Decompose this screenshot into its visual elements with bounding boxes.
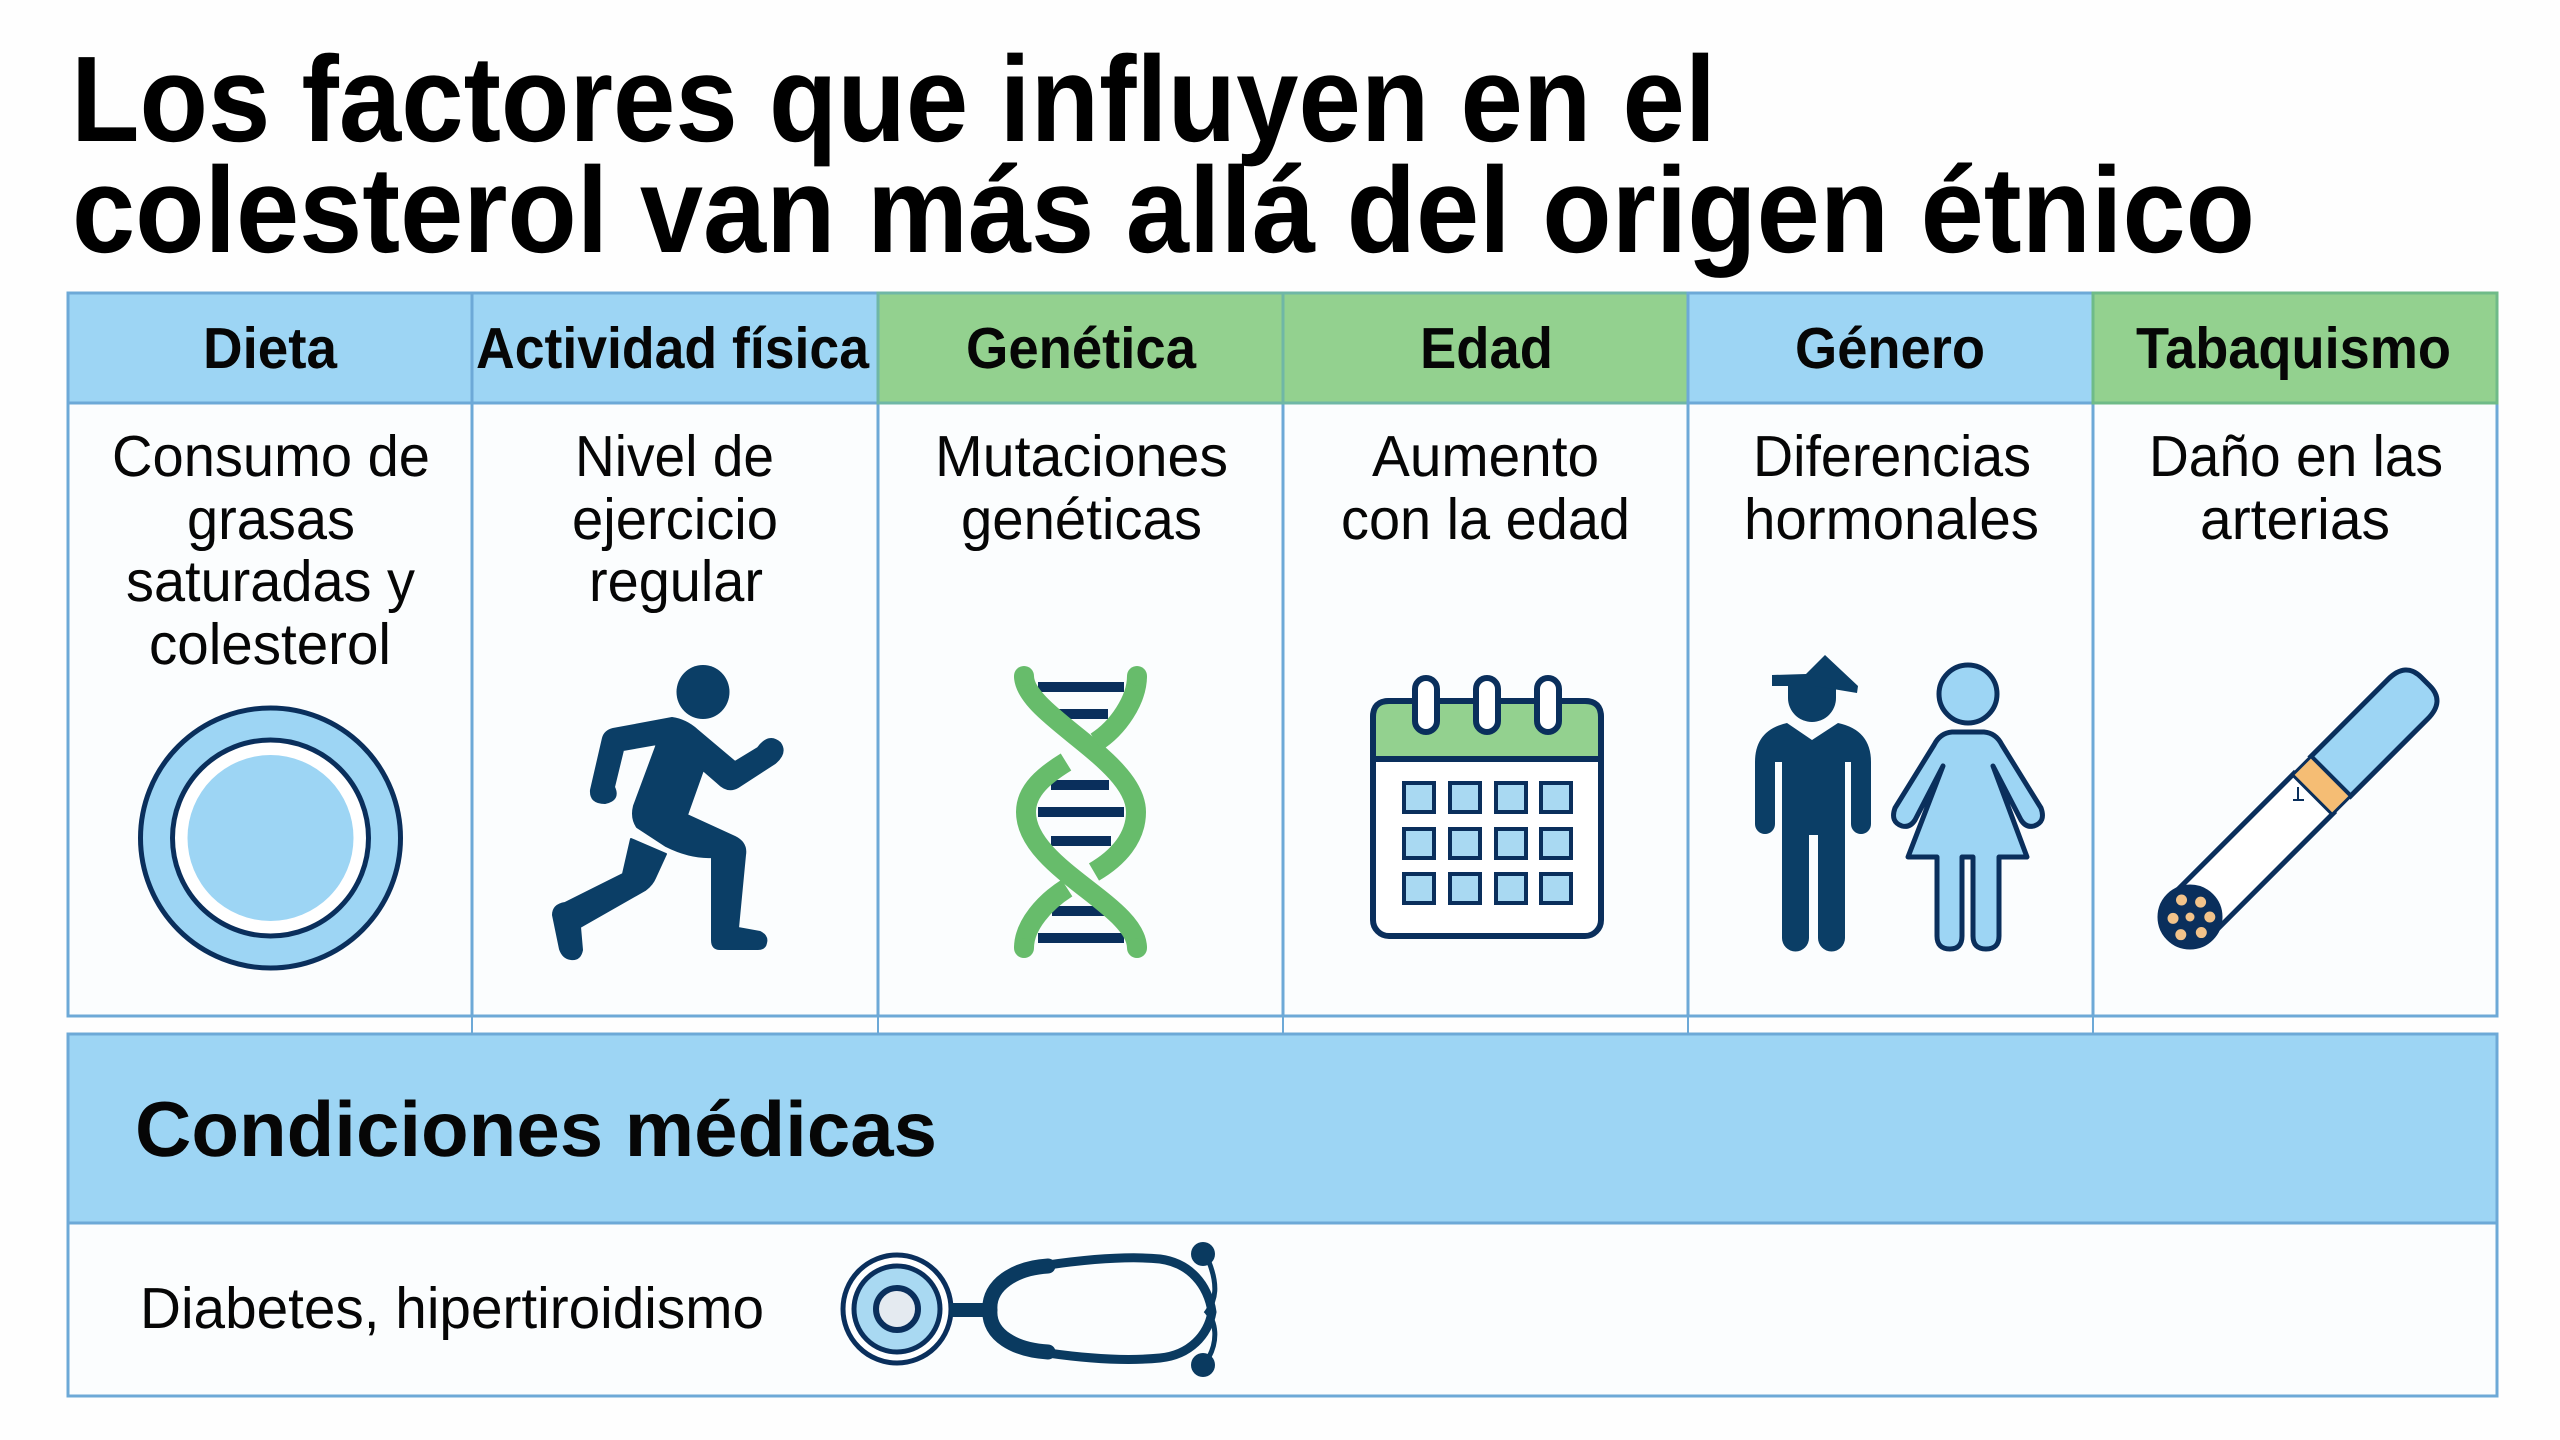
header: Dieta: Dieta bbox=[203, 316, 338, 381]
text: Actividad description: regular bbox=[589, 549, 763, 614]
text: Genética description: genéticas bbox=[961, 487, 1202, 552]
text: Genética description bbox=[935, 424, 1228, 552]
text: Edad description: con la edad bbox=[1341, 487, 1630, 552]
header: Genética: Genética bbox=[966, 316, 1197, 381]
header: Edad: Edad bbox=[1420, 316, 1553, 381]
text: Género description: hormonales bbox=[1744, 487, 2039, 552]
header: Condiciones médicas: Condiciones médicas bbox=[135, 1085, 937, 1173]
icon: cigarette bbox=[2148, 660, 2447, 959]
column stubs bbox=[472, 1016, 2093, 1033]
text: Edad description: Aumento bbox=[1372, 424, 1599, 489]
title bbox=[71, 31, 2255, 278]
text: Dieta description: Consumo de bbox=[112, 424, 430, 489]
text: Género description: Diferencias bbox=[1753, 424, 2031, 489]
header: Condiciones médicas bbox=[68, 1034, 2497, 1223]
text: Tabaquismo description: Daño en las bbox=[2149, 424, 2443, 489]
panel: Condiciones médicas bbox=[68, 1034, 2497, 1396]
header: Actividad física bbox=[472, 293, 878, 403]
icon: calendar bbox=[1373, 678, 1601, 936]
header: Género bbox=[1688, 293, 2093, 403]
header: Genética bbox=[878, 293, 1283, 403]
header: Tabaquismo: Tabaquismo bbox=[2136, 316, 2451, 381]
header: Actividad física: Actividad física bbox=[476, 316, 870, 381]
text: Actividad description: Nivel de bbox=[575, 424, 774, 489]
panel: Tabaquismo bbox=[2093, 293, 2497, 1016]
icon: runner bbox=[553, 665, 783, 959]
text: Género description bbox=[1744, 424, 2039, 552]
icon: man and woman bbox=[1755, 655, 2042, 952]
header: Edad bbox=[1283, 293, 1688, 403]
panel: Edad bbox=[1283, 293, 1688, 1016]
icon: plate bbox=[140, 708, 400, 968]
text: Diabetes, hipertiroidismo: Diabetes, hipertiroidismo bbox=[140, 1276, 764, 1341]
header: Tabaquismo bbox=[2093, 293, 2497, 403]
header: Género: Género bbox=[1795, 316, 1985, 381]
header: Dieta bbox=[68, 293, 472, 403]
icon: stethoscope bbox=[843, 1242, 1215, 1377]
panel: Actividad física bbox=[472, 293, 878, 1016]
icon: DNA helix bbox=[1014, 666, 1147, 958]
text: Tabaquismo description bbox=[2149, 424, 2443, 552]
panel: Genética bbox=[878, 293, 1283, 1016]
text: Actividad description: ejercicio bbox=[572, 487, 778, 552]
text: Dieta description: saturadas y bbox=[126, 549, 415, 614]
text: Dieta description: colesterol bbox=[149, 612, 391, 677]
text: Tabaquismo description: arterias bbox=[2200, 487, 2390, 552]
text: Dieta description: grasas bbox=[187, 487, 355, 552]
text: Dieta description bbox=[112, 424, 430, 677]
title: Los factores que influyen en el bbox=[71, 31, 1716, 167]
text: Edad description bbox=[1341, 424, 1630, 552]
title: colesterol van más allá del origen étnico bbox=[72, 142, 2255, 278]
panel: Género bbox=[1688, 293, 2093, 1016]
text: Actividad description bbox=[572, 424, 778, 614]
panel: Dieta bbox=[68, 293, 472, 1016]
text: Genética description: Mutaciones bbox=[935, 424, 1228, 489]
